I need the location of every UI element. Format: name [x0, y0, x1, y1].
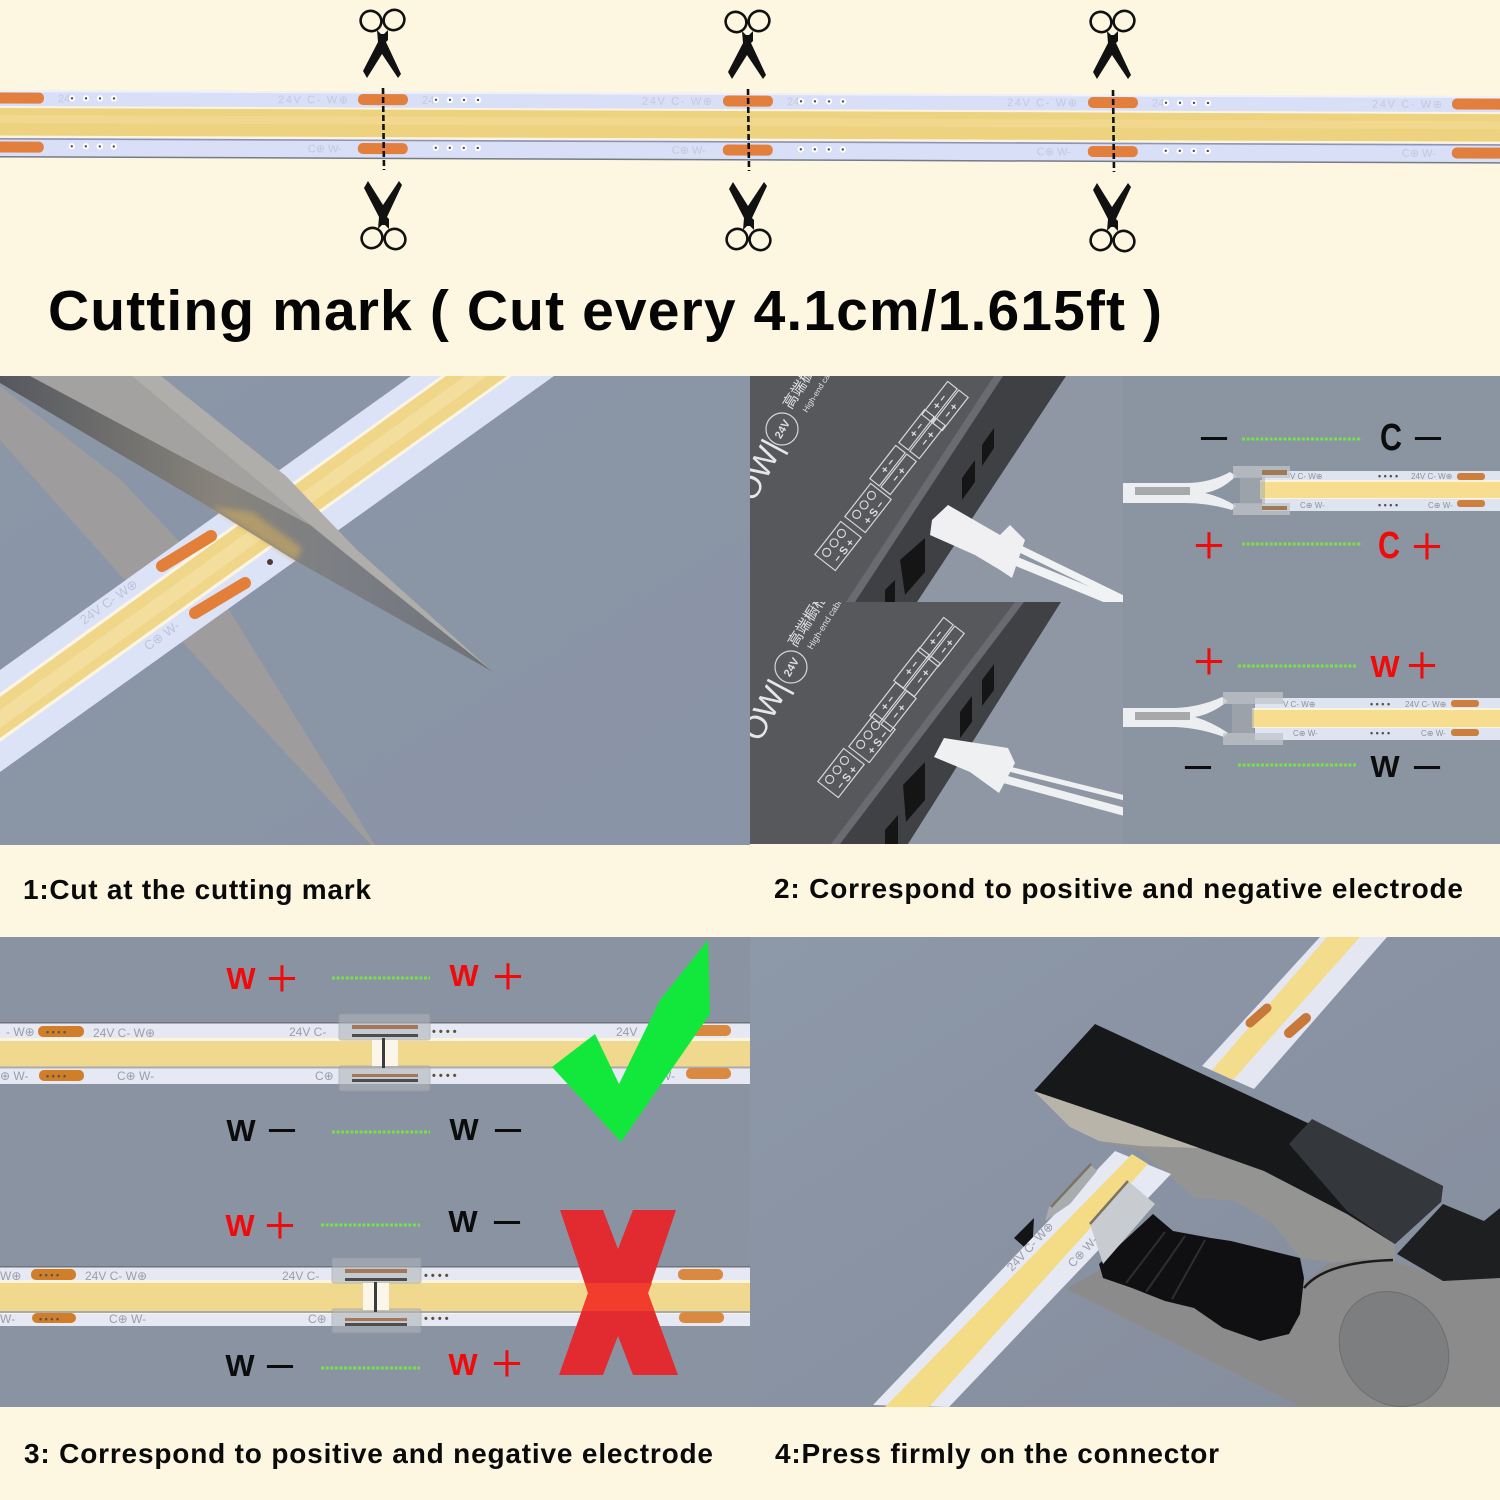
power supply top: + − [931, 392, 950, 412]
LED strip with cutting marks: C⊕ W- [1037, 146, 1071, 158]
icon: green check mark [552, 940, 710, 1142]
wiring labels wrong: W [225, 1348, 255, 1383]
power supply bottom: High-end cabinet [805, 588, 850, 651]
LED strip with cutting marks: 24 [787, 96, 799, 108]
wiring labels wrong: W [448, 1204, 478, 1239]
strip correct: - W⊕ [6, 1025, 35, 1039]
strip with connector bottom: • • • • [1370, 728, 1390, 738]
power supply bottom: 24V [782, 655, 802, 679]
strip correct: ⊕ W- [0, 1069, 28, 1083]
power supply top: − + [919, 429, 938, 449]
power supply bottom: + − [927, 628, 946, 648]
strip with connector top: V C- W⊕ [1290, 472, 1322, 481]
wiring labels correct: − [266, 1098, 298, 1161]
power supply top: + S − [861, 499, 887, 527]
strip wrong: • • • • [39, 1314, 59, 1324]
strip with connector top [1123, 466, 1500, 515]
wiring labels C and W: − [1198, 406, 1230, 469]
strip with connector top: • • • • [1378, 471, 1398, 481]
power supply top: − + [890, 465, 909, 485]
strip with connector top: C⊕ W- [1428, 501, 1453, 510]
LED strip diagonal [0, 376, 554, 772]
strip correct [0, 1014, 750, 1091]
strip correct: • • • • [46, 1027, 66, 1037]
caption step 2: 2: Correspond to positive and negative electrode [774, 873, 1463, 904]
strip wrong: W⊕ [0, 1269, 21, 1283]
wiring labels C and W: + [1193, 513, 1225, 576]
power supply bottom: + − [903, 658, 922, 678]
lower strip with connector: C⊕ W- [1065, 1233, 1101, 1270]
upper scissor blade [0, 376, 493, 672]
upper strip [1202, 937, 1387, 1089]
wiring labels correct: W [226, 961, 256, 996]
caption step 3: 3: Correspond to positive and negative electrode [24, 1438, 713, 1469]
wiring labels C and W: W [1370, 649, 1400, 684]
caption step 1: 1:Cut at the cutting mark [23, 874, 371, 905]
LED strip diagonal: 24V C- W⊕ [77, 576, 140, 627]
power supply bottom [734, 588, 1125, 844]
title: Cutting mark ( Cut every 4.1cm/1.615ft ) [48, 279, 1162, 343]
LED strip with cutting marks: 24 [1152, 98, 1164, 110]
wiring labels correct: − [492, 1098, 524, 1161]
power supply bottom: − + [890, 702, 909, 722]
power supply top: 24V [773, 417, 793, 441]
pliers metal [1034, 1091, 1500, 1428]
power supply top: OW| [728, 433, 790, 506]
strip wrong: C⊕ [308, 1312, 327, 1326]
wiring labels C and W: + [1406, 633, 1438, 696]
panel: step 4 pliers photo [750, 937, 1500, 1428]
LED strip with cutting marks: C⊕ W- [1402, 148, 1436, 160]
wiring labels C and W: W [1370, 749, 1400, 784]
strip with connector bottom: V C- W⊕ [1283, 700, 1315, 709]
strip correct: C⊕ [315, 1069, 334, 1083]
strip wrong: • • • • [424, 1313, 449, 1325]
LED strip with cutting marks: 24V C- W⊕ [1372, 99, 1442, 111]
wiring labels C and W: − [1411, 735, 1443, 798]
lower scissor blade [0, 386, 375, 845]
power supply top: − S + [831, 537, 857, 565]
black rubber grip [1099, 1214, 1304, 1341]
strip correct: • • • • [46, 1071, 66, 1081]
strip correct: W- [660, 1069, 675, 1083]
wiring labels wrong: − [264, 1334, 296, 1397]
strip wrong: • • • • [424, 1270, 449, 1282]
wiring labels wrong: − [491, 1190, 523, 1253]
power supply bottom: + − [879, 693, 898, 713]
wiring labels C and W [1184, 424, 1442, 777]
wiring labels correct: W [226, 1113, 256, 1148]
wiring labels C and W: − [1412, 406, 1444, 469]
strip correct: • • • • [432, 1070, 457, 1082]
LED strip with cutting marks: 24 [422, 95, 434, 107]
LED strip with cutting marks: 24 [58, 93, 70, 105]
strip wrong: 24V C- [282, 1269, 319, 1283]
wiring labels C and W: − [1182, 735, 1214, 798]
lower strip with connector [873, 1151, 1171, 1407]
panel: step 1 cutting photo [0, 376, 750, 845]
panel: step 3 correct and wrong polarity [0, 937, 750, 1407]
strip with connector top: 24V C- W⊕ [1411, 472, 1452, 481]
wiring labels correct: + [492, 944, 524, 1007]
power supply bottom: − + [914, 667, 933, 687]
strip with connector top: • • • • [1378, 500, 1398, 510]
strip correct: 24V C- [289, 1025, 326, 1039]
wiring labels wrong [225, 1211, 520, 1376]
strip wrong: W- [0, 1312, 15, 1326]
power supply bottom: − + [938, 637, 957, 657]
wiring labels wrong: + [491, 1331, 523, 1394]
strip correct: • • • • [432, 1026, 457, 1038]
wiring labels wrong: W [225, 1208, 255, 1243]
strip with connector bottom [1123, 692, 1500, 745]
power supply top: − + [942, 401, 961, 421]
wiring labels C and W: C [1378, 525, 1400, 567]
pliers black jaw [1034, 1024, 1500, 1281]
wiring labels C and W: C [1380, 417, 1402, 459]
icon: scissors row top [357, 6, 1138, 79]
strip with connector bottom: 24V C- W⊕ [1405, 700, 1446, 709]
strip with connector bottom: C⊕ W- [1293, 729, 1318, 738]
wiring labels correct: W [449, 1112, 479, 1147]
power supply top [750, 376, 1123, 602]
strip correct: C⊕ W- [117, 1069, 154, 1083]
icon: scissors row bottom [358, 181, 1138, 255]
strip wrong: • • • • [39, 1270, 59, 1280]
wiring labels wrong: W [448, 1347, 478, 1382]
lower strip with connector: 24V C- W⊕ [1004, 1219, 1057, 1274]
power supply top: + − [908, 420, 927, 440]
caption step 4: 4:Press firmly on the connector [775, 1438, 1219, 1469]
strip wrong: C⊕ W- [109, 1312, 146, 1326]
wiring labels correct [226, 963, 522, 1141]
LED strip with cutting marks: 24V C- W⊕ [642, 96, 712, 108]
wiring labels C and W: + [1193, 629, 1225, 692]
strip correct: 24V [616, 1025, 637, 1039]
power supply top: 高端橱柜 [780, 352, 826, 412]
strip with connector top: C⊕ W- [1300, 501, 1325, 510]
icon: red X mark [559, 1210, 678, 1375]
power supply top: High-end cabinet [801, 357, 841, 414]
LED strip with cutting marks: 24V C- W⊕ [278, 94, 348, 106]
wiring labels correct: W [449, 958, 479, 993]
power supply bottom: OW| [734, 673, 796, 746]
power supply bottom: + S − [865, 729, 891, 757]
LED strip with cutting marks: C⊕ W- [672, 145, 706, 157]
panel: step 2 connector photo [728, 352, 1500, 844]
strip wrong [0, 1258, 750, 1333]
wiring labels correct: + [266, 946, 298, 1009]
LED strip diagonal: C⊕ W- [141, 618, 182, 653]
strip correct: 24V C- W⊕ [93, 1026, 155, 1040]
white wires [1016, 546, 1123, 602]
LED strip with cutting marks: 24V C- W⊕ [1007, 97, 1077, 109]
LED strip with cutting marks [0, 88, 1500, 172]
wiring labels wrong: + [264, 1193, 296, 1256]
strip with connector bottom: C⊕ W- [1421, 729, 1446, 738]
wiring labels C and W: + [1411, 514, 1443, 577]
power supply top: + − [879, 456, 898, 476]
power supply bottom: 高端橱柜 [785, 590, 831, 650]
LED strip with cutting marks: C⊕ W- [308, 143, 342, 155]
strip with connector bottom: • • • • [1370, 699, 1390, 709]
strip wrong: 24V C- W⊕ [85, 1269, 147, 1283]
power supply bottom: − S + [834, 764, 860, 792]
